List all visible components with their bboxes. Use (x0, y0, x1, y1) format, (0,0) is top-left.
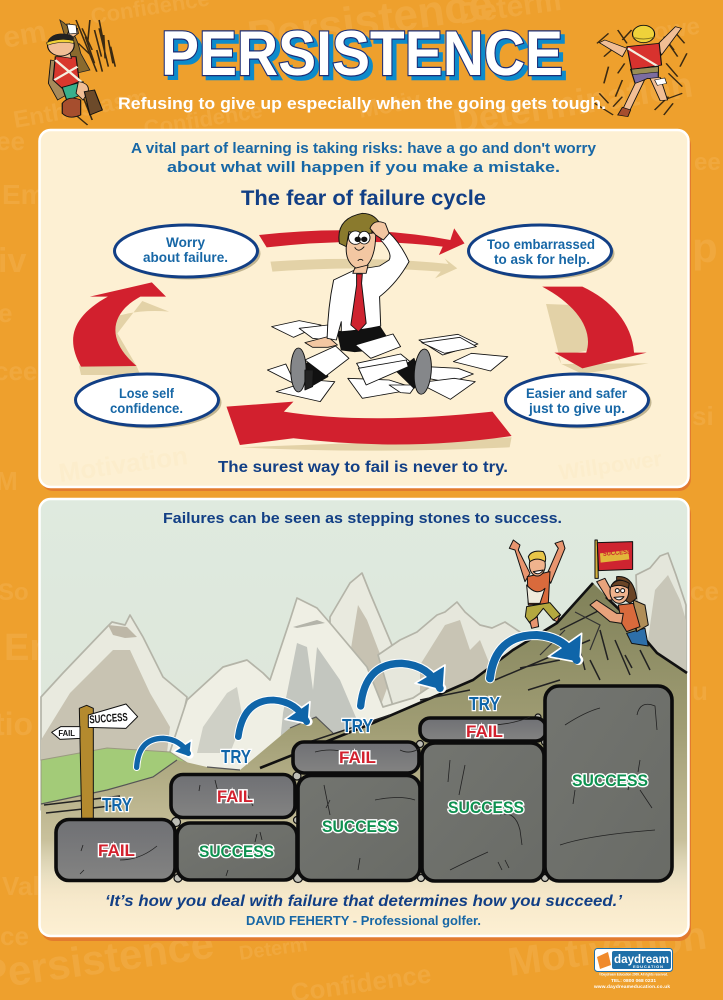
title: PERSISTENCE (161, 19, 563, 89)
watermark words: si (692, 401, 714, 431)
oval: too embarrassed: Too embarrassed (487, 237, 595, 252)
far right mountain (636, 553, 686, 680)
intro text: about what will happen if you make a mistake. (167, 160, 560, 176)
try labels: TRY (342, 716, 373, 736)
stone labels: SUCCESS (572, 771, 648, 790)
watermark words: Determination (450, 64, 695, 142)
flag label: SUCCESS (603, 549, 631, 558)
stone: success 3 (422, 743, 544, 881)
stone: success 4 (545, 686, 672, 881)
oval: easier and safer: just to give up. (528, 401, 625, 416)
watermark words: u (692, 676, 708, 706)
oval: easier and safer: Easier and safer (526, 386, 628, 401)
heading: The fear of failure cycle (241, 187, 486, 210)
icon: left climber (47, 20, 115, 125)
panel: fear of failure cycle (40, 130, 691, 491)
oval: worry about failure: Worry (166, 235, 205, 250)
intro text: A vital part of learning is taking risks: have a go and don't worry (131, 141, 596, 157)
arrow: try 4 (490, 633, 582, 678)
quote attribution: DAVID FEHERTY - Professional golfer. (246, 914, 481, 928)
watermark words: p (692, 224, 718, 271)
intro text (131, 141, 596, 176)
watermark words: Enthusiasm (11, 84, 150, 134)
oval: lose self confidence: Lose self (119, 386, 174, 401)
hand on floor (305, 337, 337, 347)
arrow: confidence to worry (73, 282, 166, 367)
stone labels: FAIL (217, 787, 253, 806)
watermark words: ee (694, 149, 721, 176)
oval: too embarrassed: to ask for help. (494, 252, 590, 267)
icon: right climber (595, 25, 687, 117)
closing line: The surest way to fail is never to try. (218, 459, 508, 476)
green field (41, 748, 230, 810)
stone labels: FAIL (98, 841, 135, 860)
stone labels: FAIL (466, 722, 503, 741)
stone: success 1 (177, 823, 297, 880)
watermark words: Motivation (505, 914, 709, 985)
arrow: try 3 (361, 663, 445, 706)
arrow: try 1 (137, 738, 192, 767)
oval: worry about failure: about failure. (143, 250, 228, 265)
watermark words: Determ (238, 934, 309, 965)
arrow: worry to embarrassed (259, 228, 465, 255)
papers on legs (305, 334, 410, 385)
stone: fail 4 (420, 718, 546, 741)
logo: daydream education: TEL: 0800 068 0231 (611, 978, 656, 984)
head (346, 230, 376, 270)
watermark words: Val (2, 871, 40, 901)
logo: daydream education: EDUCATION (633, 964, 663, 969)
arrow: give up to lose confidence (226, 402, 512, 445)
oval: lose self confidence: confidence. (110, 401, 183, 416)
watermark words: Lowe (637, 13, 702, 48)
sign: fail: FAIL (58, 729, 75, 738)
shirt (327, 233, 409, 340)
character: worried man (267, 213, 508, 402)
hill (41, 583, 687, 905)
panel background (40, 130, 691, 491)
tie (351, 274, 366, 332)
stone labels (98, 722, 648, 861)
arrow: embarrassed to give up (542, 287, 647, 368)
stone: fail 2 (171, 774, 295, 818)
watermark words: En (4, 627, 53, 669)
arrow shadows (79, 258, 649, 451)
try labels: TRY (221, 747, 251, 767)
quote: ‘It’s how you deal with failure that determines how you succeed.’ (105, 893, 623, 910)
mountains (41, 573, 537, 773)
character: cheering climber (509, 540, 565, 628)
stone: fail 1 (56, 820, 175, 880)
panel: stepping stones (40, 499, 691, 941)
watermark words: Em (2, 179, 46, 210)
paper piles (267, 321, 508, 402)
stone labels: SUCCESS (322, 817, 398, 836)
panel background: Motivation (57, 440, 190, 488)
shoes (291, 348, 306, 392)
try labels (102, 694, 500, 815)
signpost (52, 704, 138, 818)
sign: success: SUCCESS (89, 712, 128, 726)
watermark words: ce (690, 576, 719, 606)
stone: success 2 (298, 776, 420, 880)
oval: easier and safer (506, 374, 652, 428)
stone: fail 3 (293, 742, 419, 773)
cycle diagram (73, 213, 649, 451)
logo: daydream education (593, 948, 672, 990)
watermark words: em (0, 15, 49, 55)
arrow: try 2 (238, 700, 310, 737)
oval: too embarrassed (468, 225, 614, 280)
watermark words: Motiv (356, 86, 423, 124)
stone labels: SUCCESS (448, 798, 524, 817)
panel background: Willpower (557, 446, 664, 485)
title: PERSISTENCE (165, 23, 567, 93)
trousers (337, 326, 393, 352)
subtitle: Refusing to give up especially when the going gets tough. (118, 95, 606, 113)
stone labels: SUCCESS (199, 842, 274, 861)
try labels: TRY (102, 795, 132, 815)
pebbles (172, 714, 548, 882)
watermark words: Confidence (142, 98, 264, 141)
shins (305, 360, 328, 387)
post (79, 705, 93, 818)
logo: daydream education: www.daydreameducation.co.uk (593, 984, 670, 990)
character: woman with flag (590, 540, 648, 646)
stone labels: FAIL (339, 748, 376, 767)
oval: lose self confidence (76, 374, 222, 428)
logo: daydream education: daydream (614, 954, 669, 966)
stepping stones (56, 686, 672, 882)
stone cracks (80, 704, 657, 876)
try labels: TRY (469, 694, 500, 714)
panel background (40, 499, 691, 941)
logo: daydream education: ©Daydream Education 2009. All rights reserved. (599, 972, 668, 976)
oval: worry about failure (114, 225, 260, 280)
heading: Failures can be seen as stepping stones to success. (163, 511, 562, 527)
watermark words: ce (0, 921, 29, 951)
